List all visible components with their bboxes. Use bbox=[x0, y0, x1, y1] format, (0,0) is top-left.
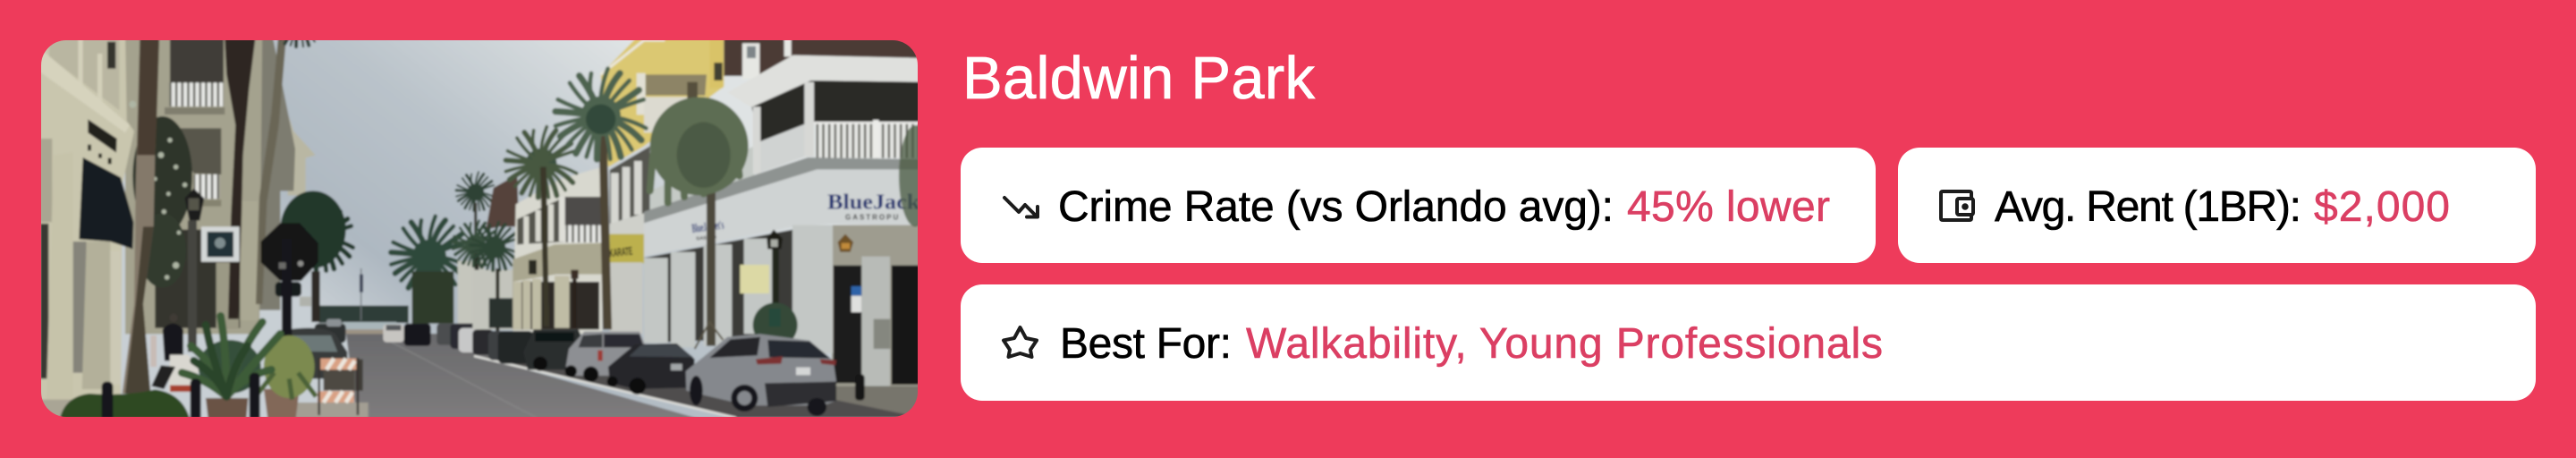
silver SUV bbox=[686, 334, 836, 416]
palm in front of building bbox=[650, 97, 749, 349]
heading: Baldwin Park bbox=[962, 45, 1315, 112]
small signs bbox=[300, 297, 311, 306]
second floor recess bbox=[751, 78, 928, 141]
posts bbox=[753, 82, 814, 174]
icon: trending down arrow bbox=[1004, 198, 1038, 216]
brick upper wall bbox=[724, 30, 927, 79]
restaurant signs: GASTRO bbox=[696, 235, 716, 242]
karate sign: KARATE bbox=[609, 245, 633, 259]
street lamp bbox=[185, 189, 204, 352]
far palms bbox=[505, 127, 577, 327]
restaurant signs bbox=[691, 190, 930, 242]
restaurant signs: BlueJacke bbox=[827, 190, 930, 214]
icon: wallet bbox=[1941, 191, 1973, 220]
barricade bbox=[318, 358, 363, 415]
silver van bbox=[565, 332, 646, 382]
ground floor shade bbox=[154, 229, 242, 329]
value: $2,000: $2,000 bbox=[2314, 183, 2450, 231]
sandwich board bbox=[151, 355, 199, 392]
right side of street bbox=[470, 30, 932, 423]
right edge foliage bbox=[899, 125, 932, 226]
card: crime rate bbox=[961, 148, 1876, 263]
low palm bbox=[470, 222, 519, 331]
far brick building bbox=[486, 174, 519, 230]
left palm trunk bbox=[122, 109, 157, 395]
crown of palm at top bbox=[280, 40, 317, 50]
distant cars bbox=[315, 319, 346, 343]
ground floor bbox=[644, 225, 928, 386]
balcony upper bbox=[165, 30, 225, 114]
framed hanging sign bbox=[201, 226, 240, 262]
label: best for: Best For: bbox=[1060, 320, 1232, 368]
hedge bbox=[59, 388, 191, 417]
card: best for bbox=[961, 284, 2536, 401]
green sign and plant bbox=[753, 302, 798, 347]
parked cars bbox=[472, 329, 836, 416]
restaurant signs: BlueJacket's bbox=[691, 219, 724, 236]
agave plant bbox=[182, 316, 280, 396]
label: crime rate: Crime Rate (vs Orlando avg): bbox=[1058, 183, 1614, 231]
planter pots bbox=[204, 387, 300, 417]
sidewalk by barricade bbox=[295, 401, 369, 417]
tan building bbox=[513, 167, 602, 334]
bollard bbox=[855, 374, 865, 401]
left side of street bbox=[27, 0, 498, 423]
distant palms bbox=[391, 172, 498, 324]
mid white floors bbox=[610, 146, 650, 334]
white fascia bbox=[644, 168, 928, 257]
side of middle building bbox=[255, 30, 295, 310]
infographic canvas bbox=[41, 40, 2536, 417]
variegated plant bbox=[258, 335, 316, 400]
distant shoreline and flag bbox=[319, 268, 409, 334]
shop sign bbox=[88, 119, 117, 164]
road bbox=[345, 333, 905, 417]
roof slab bbox=[727, 55, 928, 107]
icon: star bbox=[1004, 327, 1037, 357]
dark palm trunk bbox=[225, 30, 257, 319]
upper balcony of front building bbox=[41, 40, 129, 132]
yellow hanging sign bbox=[740, 265, 769, 293]
storefront columns bbox=[41, 138, 111, 417]
black sedan bbox=[607, 344, 695, 394]
sidewalk bbox=[834, 386, 928, 423]
bollards bbox=[102, 373, 260, 423]
dark parked car bbox=[289, 328, 347, 378]
black awning bbox=[79, 157, 133, 249]
accessible parking sign bbox=[852, 286, 861, 312]
yellow building bbox=[601, 30, 724, 167]
far building bbox=[288, 114, 316, 195]
balcony lower bbox=[174, 128, 221, 207]
middle building front bbox=[125, 30, 262, 334]
far cars bbox=[472, 329, 534, 364]
photo: Baldwin Park street scene bbox=[41, 40, 918, 417]
restaurant signs: GASTROPU bbox=[845, 213, 900, 221]
dark SUV bbox=[523, 329, 583, 371]
far palm behind stop sign bbox=[280, 191, 353, 322]
value: walkability, young professionals: Walkability, Young Professionals bbox=[1246, 320, 1883, 368]
sky bbox=[120, 40, 918, 417]
stop sign (rear) bbox=[259, 222, 318, 338]
front left building bbox=[41, 40, 134, 401]
card: average rent bbox=[1898, 148, 2536, 263]
far white building bbox=[472, 270, 513, 329]
lanterns bbox=[571, 230, 853, 328]
ivy foliage bbox=[129, 101, 192, 288]
left balcony railing bbox=[758, 124, 805, 174]
lower railing bbox=[650, 146, 754, 213]
label: average rent: Avg. Rent (1BR): bbox=[1995, 183, 2301, 231]
tall palm trunk and crown bbox=[555, 69, 646, 329]
distant cars on road bbox=[383, 324, 484, 352]
floor slab bbox=[644, 157, 928, 223]
balcony rail bbox=[814, 120, 928, 158]
value: 45% lower: 45% lower bbox=[1627, 183, 1830, 231]
distant palm trunk bbox=[256, 30, 287, 304]
person bbox=[150, 314, 183, 367]
